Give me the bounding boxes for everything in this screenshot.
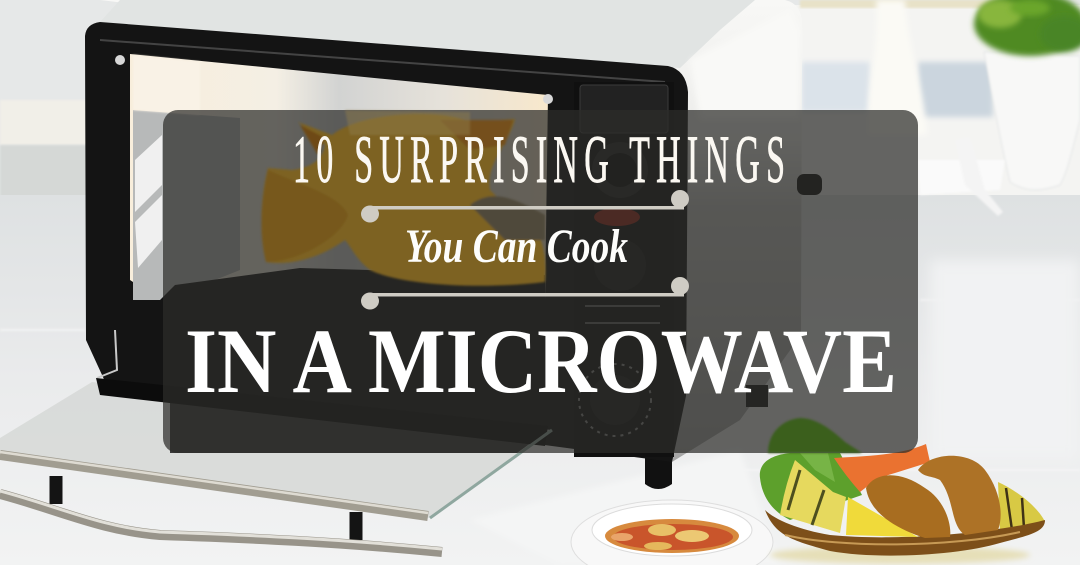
handle posts: [56, 476, 356, 540]
lettuce seen through panel: [768, 418, 862, 453]
upper door rail: [0, 455, 428, 516]
oven top panel: [100, 0, 755, 68]
oven front frame: [85, 22, 688, 462]
yellow garnish slices: [998, 482, 1045, 532]
upper ornamental divider: [361, 190, 689, 222]
title line 1: 10 SURPRISING THINGS: [293, 121, 785, 197]
chicken wing 2: [918, 456, 1001, 535]
rear foot: [746, 385, 768, 407]
lettuce: [760, 453, 862, 520]
title line 3: IN A MICROWAVE: [185, 310, 897, 412]
oven knob on side: [797, 174, 822, 195]
chicken wing 1: [866, 475, 950, 538]
microwave oven: [85, 0, 822, 489]
lower ornamental divider: [361, 277, 689, 310]
plate of chicken wings and vegetables: [760, 444, 1045, 564]
open glass door with handle: [0, 378, 552, 552]
control panel: [574, 82, 674, 457]
lower door handle: [0, 494, 442, 552]
roast chicken seen through panel: [262, 110, 545, 286]
dipping sauce bowl: [571, 500, 773, 565]
dark translucent title panel: [163, 110, 918, 453]
plate shadow: [770, 546, 1030, 564]
window screws: [115, 55, 125, 65]
vase, pot, plant and saucer in the background: [868, 0, 1080, 216]
front foot: [645, 455, 672, 489]
pineapple wedges: [780, 460, 846, 533]
door glass: [0, 382, 552, 518]
door hinge: [97, 330, 117, 378]
carrots: [834, 444, 930, 492]
oven cavity wall: [130, 54, 548, 300]
title line 2: script: You Can Cook: [405, 220, 628, 273]
cooking tray: [150, 268, 545, 430]
oven cavity left wall: [133, 110, 240, 300]
oven side panel: [100, 0, 802, 462]
plate: [765, 510, 1045, 556]
